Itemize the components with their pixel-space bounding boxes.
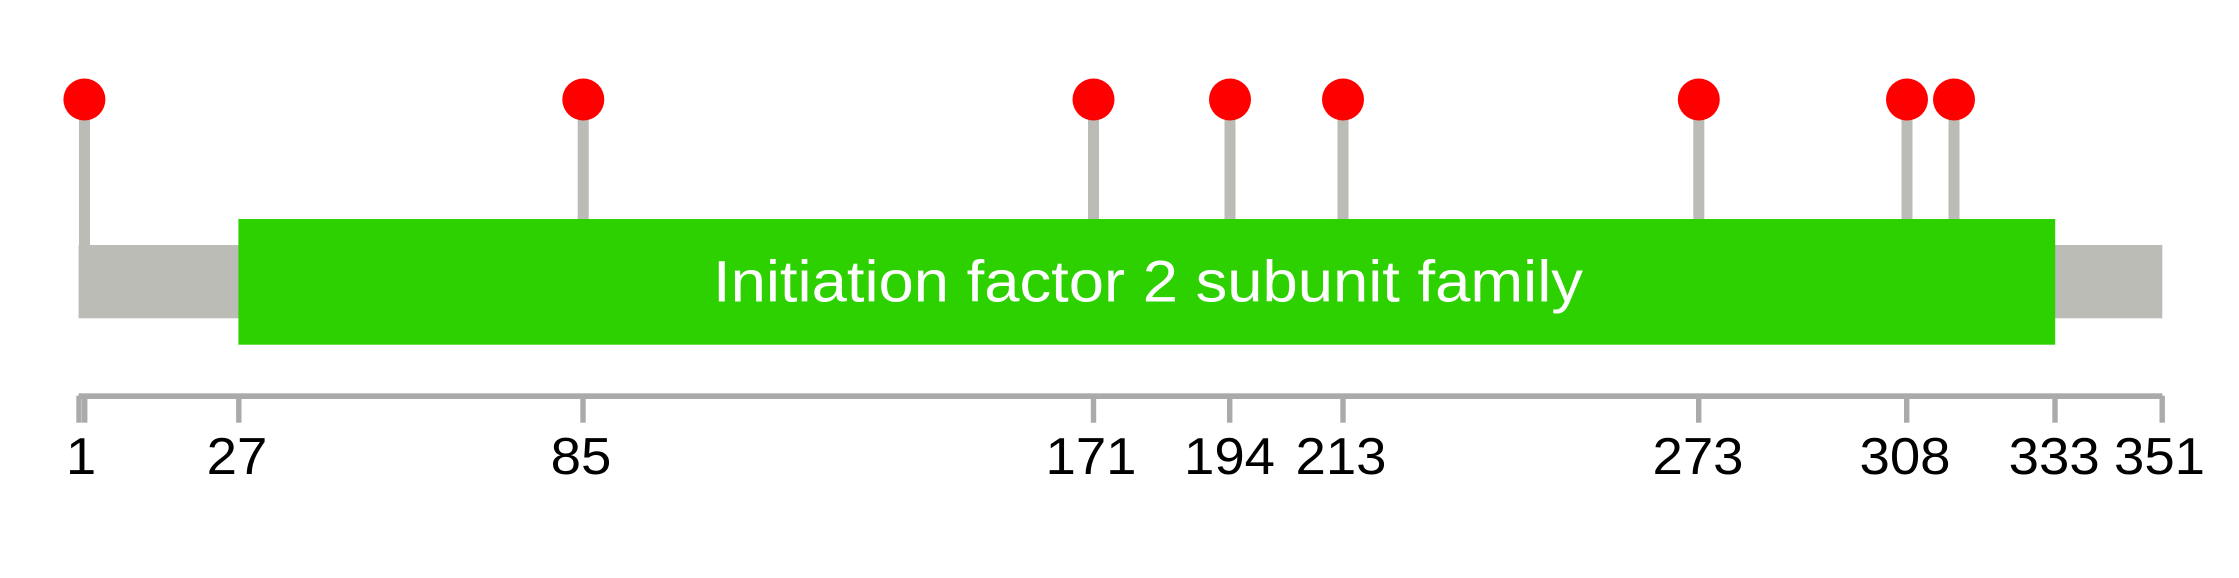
axis labels: 1 [66, 428, 96, 486]
lollipop stems [79, 99, 1960, 249]
axis labels: 333 [2009, 428, 2100, 486]
axis labels: 213 [1295, 428, 1387, 486]
protein backbone bar [79, 245, 2162, 318]
axis labels: 194 [1184, 428, 1275, 486]
phosphosite markers [63, 78, 1975, 120]
axis labels: 171 [1045, 428, 1137, 486]
axis labels: 308 [1859, 428, 1951, 486]
axis labels: 273 [1652, 428, 1744, 486]
position axis [76, 393, 2165, 423]
domain: Initiation factor 2 subunit family [238, 219, 2055, 345]
axis labels [66, 428, 2205, 486]
domain label: Initiation factor 2 subunit family [713, 250, 1583, 315]
axis labels: 351 [2114, 428, 2205, 486]
axis labels: 85 [551, 428, 611, 486]
axis labels: 27 [207, 428, 267, 486]
